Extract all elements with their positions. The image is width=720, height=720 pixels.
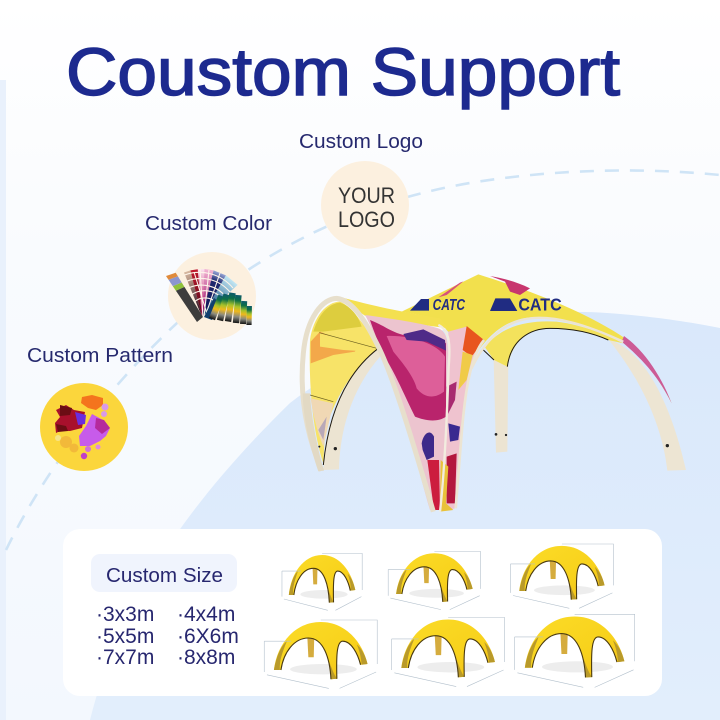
custom logo badge: YOUR bbox=[338, 183, 395, 208]
custom size card bbox=[63, 529, 662, 696]
custom logo badge: LOGO bbox=[338, 207, 395, 232]
custom color label: Custom Color bbox=[145, 213, 272, 235]
size heading pill: Custom Size bbox=[106, 564, 223, 587]
size list: ·7x7m bbox=[96, 646, 154, 669]
size list: ·8x8m bbox=[177, 646, 235, 669]
roof bbox=[402, 274, 672, 403]
front seam bbox=[438, 325, 449, 512]
title: Coustom Support bbox=[66, 35, 620, 110]
brand logo right: CATC bbox=[518, 295, 562, 315]
right arch leg bbox=[608, 339, 686, 471]
right arch rim bbox=[472, 318, 623, 368]
left roof strip bbox=[337, 296, 448, 328]
right arch underside bbox=[485, 321, 623, 367]
front right sliver bbox=[440, 327, 484, 512]
tent size 3 bbox=[510, 544, 613, 608]
tent size 6 bbox=[515, 614, 635, 687]
left interior panel bbox=[310, 302, 380, 463]
size list: ·4x4m bbox=[177, 603, 235, 626]
custom pattern label: Custom Pattern bbox=[27, 345, 173, 367]
custom logo badge bbox=[321, 161, 409, 249]
tent size 2 bbox=[388, 552, 481, 610]
brand logo right bbox=[490, 295, 562, 315]
custom pattern badge with paint splatter bbox=[40, 383, 128, 471]
brand logo left: CATC bbox=[433, 297, 466, 314]
custom logo label: Custom Logo bbox=[299, 131, 423, 153]
size list: ·6X6m bbox=[177, 625, 239, 648]
back leg bbox=[493, 347, 508, 453]
tent size 1 bbox=[282, 553, 362, 610]
size list: ·3x3m bbox=[96, 603, 154, 626]
left front arch bbox=[302, 298, 433, 512]
dashed arc connecting the options bbox=[6, 170, 720, 550]
large light blue circle backdrop bbox=[90, 312, 720, 720]
size list bbox=[96, 603, 239, 669]
front panel bbox=[365, 315, 448, 510]
valve dots bbox=[318, 433, 669, 450]
main inflatable tent bbox=[302, 274, 686, 512]
left background strip bbox=[0, 80, 6, 720]
size list: ·5x5m bbox=[96, 625, 154, 648]
right leg edge bbox=[456, 340, 484, 508]
brand logo left bbox=[410, 297, 466, 314]
tent size 5 bbox=[392, 618, 505, 687]
size heading pill bbox=[91, 554, 237, 592]
left rear arch bbox=[323, 348, 381, 470]
roof magenta edge bbox=[622, 336, 672, 403]
custom color badge with colour fan bbox=[166, 252, 256, 340]
tent size 4 bbox=[264, 620, 377, 688]
